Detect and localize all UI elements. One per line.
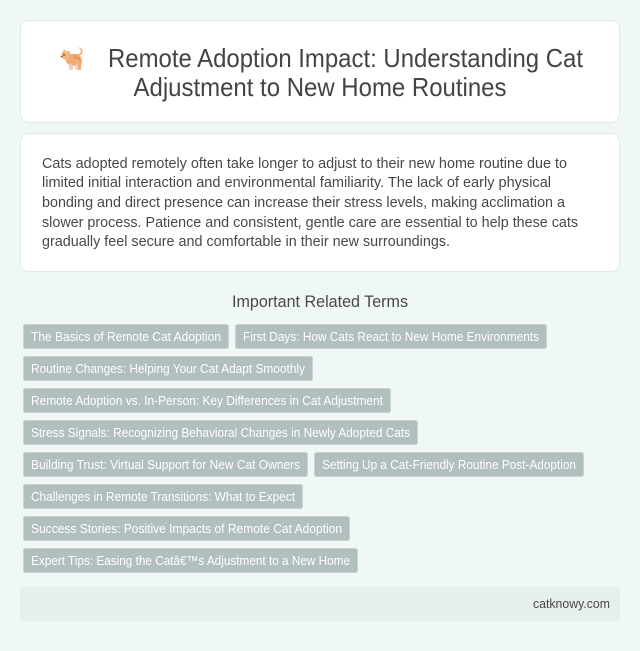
title: Adjustment to New Home Routines: [134, 74, 506, 102]
footer: catknowy.com: [533, 597, 610, 611]
tag: [24, 388, 390, 412]
tag: Challenges in Remote Transitions: What to Expect: [31, 489, 295, 504]
tag: [24, 420, 418, 444]
text block: description: bonding and direct presence can increase their stress levels, making acclimation a: [42, 194, 566, 211]
tag: Building Trust: Virtual Support for New Cat Owners: [31, 457, 300, 472]
tag: Stress Signals: Recognizing Behavioral Changes in Newly Adopted Cats: [31, 425, 410, 440]
text block: description: [42, 155, 578, 250]
title: Remote Adoption Impact: Understanding Cat: [108, 45, 583, 73]
tag: [24, 324, 228, 348]
tag: [24, 516, 350, 540]
tag: [24, 484, 302, 508]
tag: Success Stories: Positive Impacts of Remote Cat Adoption: [31, 521, 342, 536]
tag: [24, 548, 358, 572]
tag: [314, 452, 584, 476]
tag: [24, 356, 312, 380]
tag: The Basics of Remote Cat Adoption: [31, 329, 221, 344]
panel: title card: [20, 20, 620, 122]
tag: [236, 324, 546, 348]
tag: [24, 452, 308, 476]
title: [108, 45, 583, 102]
tag: Routine Changes: Helping Your Cat Adapt Smoothly: [31, 361, 305, 376]
tag: Setting Up a Cat-Friendly Routine Post-Adoption: [322, 457, 576, 472]
tag: Expert Tips: Easing the Catâ€™s Adjustment to a New Home: [31, 553, 350, 568]
text block: description: gradually feel secure and comfortable in their new surroundings.: [42, 233, 450, 250]
icon: cat: [61, 48, 83, 70]
text block: description: slower process. Patience and consistent, gentle care are essential to help these cats: [42, 214, 578, 231]
tag: Remote Adoption vs. In-Person: Key Differences in Cat Adjustment: [31, 393, 383, 408]
tag: First Days: How Cats React to New Home Environments: [243, 329, 539, 344]
tag list: related terms: [24, 324, 584, 572]
heading: related terms: Important Related Terms: [232, 293, 408, 311]
panel: description: [20, 134, 620, 272]
text block: description: Cats adopted remotely often take longer to adjust to their new home routine due to: [42, 155, 567, 172]
footer: [20, 587, 620, 621]
text block: description: limited initial interaction and environmental familiarity. The lack of early physical: [42, 174, 551, 191]
